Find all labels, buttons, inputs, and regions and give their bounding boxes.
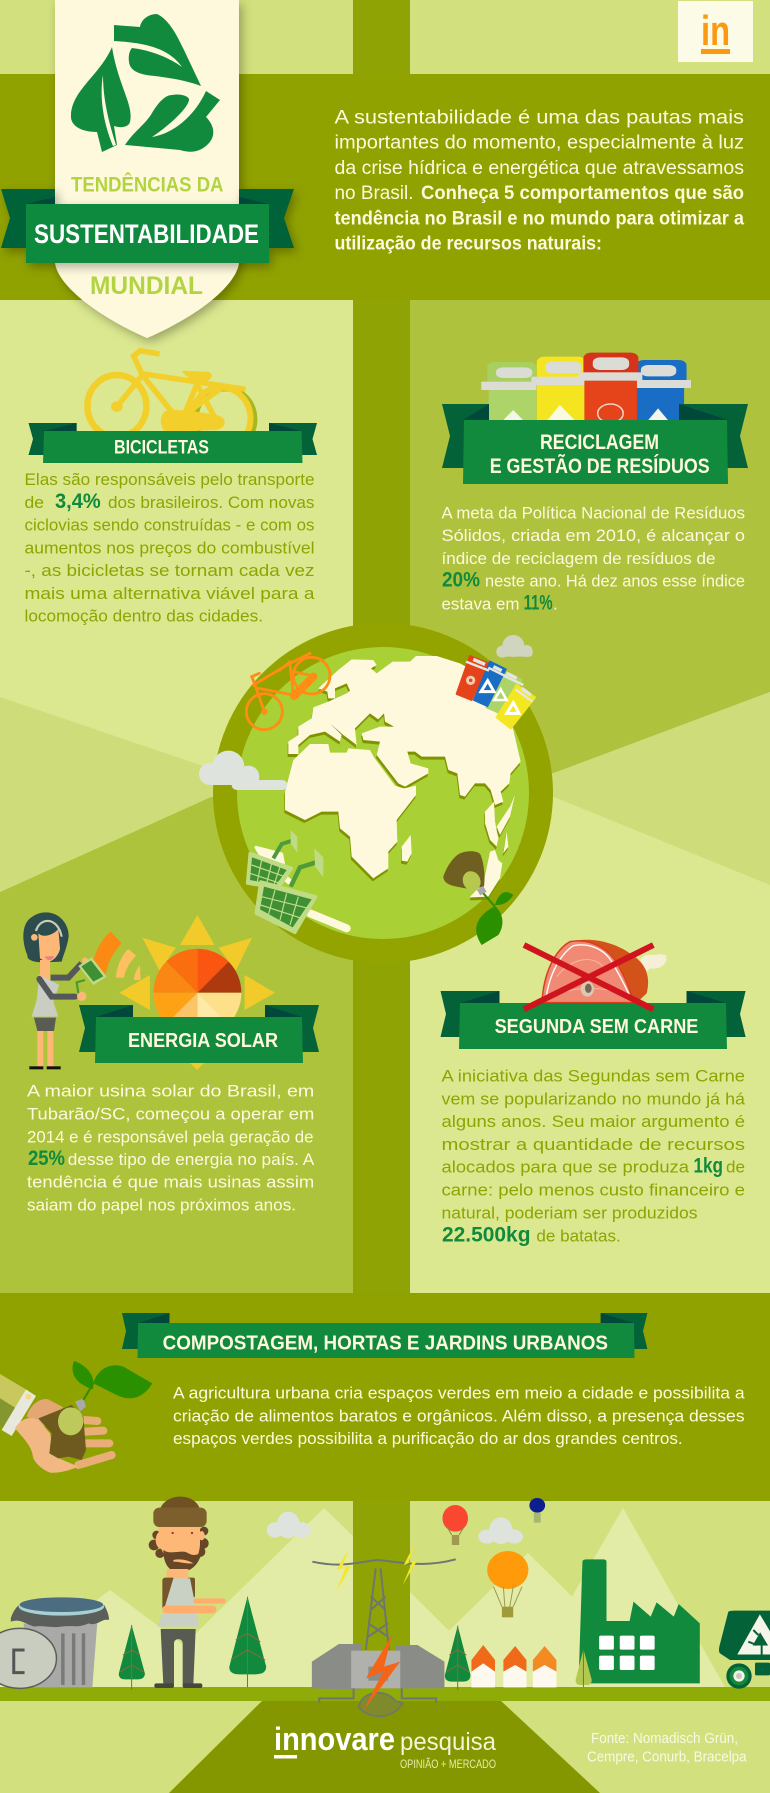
banner: energia solar [79,1005,319,1063]
text block: energia solar: 2014 e é responsável pela geração de [27,1127,314,1146]
text block: segunda sem carne: carne: pelo menos custo financeiro e [442,1181,745,1200]
text block: compostagem: criação de alimentos baratos e orgânicos. Além disso, a presença desses [173,1406,745,1425]
scene: illustration [0,1498,700,1716]
text block: bicicletas: locomoção dentro das cidades. [24,607,263,626]
icon: sun [119,915,275,1070]
text block: compostagem [173,1383,745,1448]
banner: reciclagem: E GESTÃO DE RESÍDUOS [490,455,710,478]
text block: reciclagem [442,503,745,614]
continents [284,656,521,900]
icon: garden baskets [247,830,347,933]
text block: reciclagem: A meta da Política Nacional de Resíduos [442,503,745,522]
text block: segunda sem carne: de batatas. [536,1226,621,1245]
banner: bicicletas [28,423,317,463]
text block: intro: no Brasil. [334,183,414,204]
text block: reciclagem: índice de reciclagem de resíduos de [442,549,716,568]
heading: tendências da: TENDÊNCIAS DA [71,172,224,196]
text block: intro [334,108,744,254]
text block: bicicletas: ciclovias sendo construídas - e com os [24,516,314,535]
bin: green [481,362,536,423]
text block: bicicletas [24,470,315,626]
text block: reciclagem: neste ano. Há dez anos esse índice [485,572,745,591]
text block: segunda sem carne [442,1067,746,1246]
banner: reciclagem: RECICLAGEM [540,431,659,454]
icon: recycling truck [719,1611,770,1689]
logo: innovare pesquisa [274,1721,496,1771]
icon: recycling bins [481,353,691,423]
icon: red cross [524,945,653,1009]
text block: compostagem: espaços verdes possibilita a purificação do ar dos grandes centros. [173,1429,683,1448]
icon: top right logo badge [678,1,753,62]
text block: reciclagem: 11% [524,591,553,614]
text block: bicicletas: Elas são responsáveis pelo transporte [24,470,314,489]
banner: reciclagem [442,404,748,484]
text block: energia solar: A maior usina solar do Brasil, em [27,1082,314,1101]
icon: ham [542,940,666,1003]
banner: compostagem: COMPOSTAGEM, HORTAS E JARDINS URBANOS [163,1331,608,1354]
icon: woman with solar panel [23,912,141,1069]
text block: segunda sem carne: A iniciativa das Segundas sem Carne [442,1067,745,1086]
logo: innovare pesquisa: pesquisa [400,1728,496,1756]
icon: tree [445,1626,470,1690]
text block: bicicletas: mais uma alternativa viável para a [24,584,315,603]
icon: bulb seedling [443,851,513,945]
text block: segunda sem carne: vem se popularizando no mundo já há [442,1089,746,1108]
bin: blue [636,360,691,423]
text block: source: Fonte: Nomadisch Grün, [591,1730,738,1747]
text block: intro: importantes do momento, especialmente à luz [334,133,744,154]
panel: logo pennant [55,0,239,338]
icon: top right logo badge: in [701,7,730,54]
icon: tilted recycling bins [457,656,535,728]
text block: intro: da crise hídrica e energética que atravessamos [334,158,744,179]
scene mountains [0,1508,725,1687]
icon: blue balloon [529,1498,545,1523]
banner: segunda sem carne: SEGUNDA SEM CARNE [495,1015,698,1038]
text block: energia solar [27,1082,315,1215]
banner: bicicletas: BICICLETAS [114,436,209,458]
bin: red [579,353,642,423]
text block: bicicletas: 3,4% [55,490,101,513]
text block: segunda sem carne: mostrar a quantidade de recursos [442,1135,745,1154]
text block: segunda sem carne: natural, poderiam ser produzidos [442,1203,698,1222]
icon: red balloon [442,1505,468,1545]
banner: sustentabilidade: SUSTENTABILIDADE [34,219,259,249]
banner: segunda sem carne [440,991,746,1049]
heading: mundial: MUNDIAL [90,272,203,300]
icon: tree [119,1625,145,1690]
icon: trash can [0,1597,109,1688]
text block: bicicletas: de [24,493,44,512]
text block: segunda sem carne: 22.500kg [442,1223,530,1246]
icon: orange bolt [363,1635,400,1711]
text block: segunda sem carne: alocados para que se produza [442,1158,690,1177]
icon: tree [229,1597,266,1687]
icon: cloud [267,1512,311,1538]
icon: hand with seedling [0,1361,152,1473]
text block: energia solar: Tubarão/SC, começou a operar em [27,1104,314,1123]
text block: bicicletas: dos brasileiros. Com novas [108,493,314,512]
text block: segunda sem carne: 1kg [694,1155,723,1178]
text block: reciclagem: Sólidos, criada em 2010, é alcançar o [442,526,745,545]
icon: yellow bicycle [87,351,254,450]
text block: source [587,1730,747,1766]
icon: lightning left [336,1549,351,1592]
icon: factory [579,1559,700,1683]
icon: power tower [312,1559,456,1650]
text block: energia solar: 25% [28,1147,65,1170]
banner: compostagem [122,1313,647,1358]
banner: sustentabilidade [1,189,294,263]
icon: small tree [576,1649,592,1687]
text block: bicicletas: aumentos nos preços do combustível [24,538,314,557]
bin: yellow [531,357,586,423]
text block: reciclagem: . [553,594,558,613]
banner: energia solar: ENERGIA SOLAR [128,1029,278,1052]
icon: orange balloon [487,1551,528,1617]
logo: innovare pesquisa: OPINIÃO + MERCADO [400,1758,496,1771]
text block: reciclagem: estava em [442,594,520,613]
icon: lightning right [403,1543,417,1585]
text block: intro: tendência no Brasil e no mundo para otimizar a [334,208,744,229]
icon: cloud [478,1517,523,1544]
text block: compostagem: A agricultura urbana cria espaços verdes em meio a cidade e possibilita a [173,1383,745,1402]
icon: orange bicycle [246,653,330,730]
icon: power plant [312,1644,444,1716]
text block: intro: A sustentabilidade é uma das pautas mais [334,108,744,128]
panel: ground and footer [0,1687,770,1793]
icon: cloud left [199,751,287,790]
text block: energia solar: saiam do papel nos próximos anos. [27,1196,296,1215]
text block: source: Cempre, Conurb, Bracelpa [587,1749,747,1766]
icon: houses [471,1645,556,1687]
text block: segunda sem carne: alguns anos. Seu maior argumento é [442,1112,745,1131]
text block: reciclagem: 20% [442,569,480,592]
icon: recycling leaves [71,14,220,152]
icon: cloud top right [496,635,533,658]
text block: intro: utilização de recursos naturais: [334,234,602,254]
text block: intro: Conheça 5 comportamentos que são [421,183,744,204]
logo: innovare pesquisa: innovare [274,1721,395,1757]
text block: energia solar: tendência é que mais usinas assim [27,1173,314,1192]
icon: man with hat [149,1497,226,1688]
text block: energia solar: desse tipo de energia no país. A [68,1150,315,1169]
text block: segunda sem carne: de [726,1158,745,1177]
text block: bicicletas: -, as bicicletas se tornam cada vez [24,561,314,580]
globe [199,623,553,963]
